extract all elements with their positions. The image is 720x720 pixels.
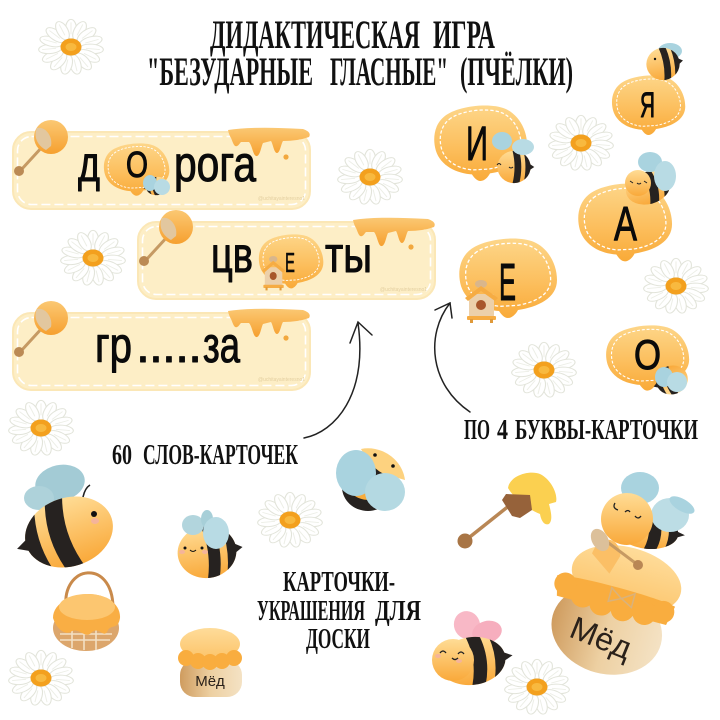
word card: дорога [13,120,310,209]
word card: дорога: д [78,136,100,192]
title: ГЛАСНЫЕ" [330,49,448,94]
label: decoration cards: УКРАШЕНИЯ [257,595,365,627]
letter card: А: А [614,198,637,251]
honey dipper [458,473,556,548]
letter bubble: О: О [126,144,148,185]
bee on О [648,359,693,402]
label: decoration cards [257,566,421,655]
word card: гроза: гр [95,317,132,373]
word card: гроза: ..... [136,317,202,373]
bee on А [622,152,679,212]
letter card: А [578,152,679,261]
word card: цветы [138,210,435,299]
label: 60 cards: 60 [112,439,132,471]
letter card: О [606,325,693,402]
title: ИГРА [433,12,495,57]
pink-winged bee [432,607,516,693]
letter card: И [434,105,534,186]
label: letter cards: 4 [497,414,508,446]
title [147,12,573,94]
big honey jar with bee [535,472,697,688]
title: (ПЧЁЛКИ) [460,49,573,94]
word card: дорога: @uchitayainteresno1 [258,196,305,202]
small honey jar [178,628,242,697]
letter bubble: Е: Е [285,247,295,278]
letter bubble: О [104,143,170,199]
letter bubble: Е [259,234,323,290]
label: decoration cards: КАРТОЧКИ- [283,566,395,598]
bee with basket [5,460,124,651]
bee middle [174,510,247,586]
word card: цветы: @uchitayainteresno1 [380,287,427,293]
bee from behind [336,448,405,511]
label: 60 cards: СЛОВ-КАРТОЧЕК [143,439,298,471]
word card: гроза [13,301,310,390]
big honey jar with bee: Мёд [565,609,637,666]
letter card: О: О [634,331,661,378]
title: "БЕЗУДАРНЫЕ [147,49,313,94]
letter card: И: И [466,118,488,171]
word card: цветы: цв [211,227,253,283]
label: decoration cards: ДЛЯ [375,595,421,627]
label: 60 cards [112,439,298,471]
letter card: Я [612,42,686,135]
basket [53,573,120,651]
jar [535,529,689,688]
label: letter cards: ПО [464,414,490,446]
bee on Я [643,42,686,85]
wings [32,460,88,506]
label: decoration cards: ДОСКИ [306,623,370,655]
bee on jar [587,472,697,570]
letter card: Е: Е [499,254,516,312]
letter card: Я: Я [640,86,655,125]
bee on И [492,132,534,186]
title: ДИДАКТИЧЕСКАЯ [210,12,420,57]
letter card: Е [459,239,557,323]
small honey jar: Мёд [195,673,225,690]
arrow: to word cards [304,322,372,438]
word card: цветы: ты [325,227,372,283]
word card: гроза: @uchitayainteresno1 [258,377,305,383]
word card: дорога: рога [174,136,256,192]
arrow: to letter cards [435,303,470,412]
word card: гроза: за [203,317,240,373]
